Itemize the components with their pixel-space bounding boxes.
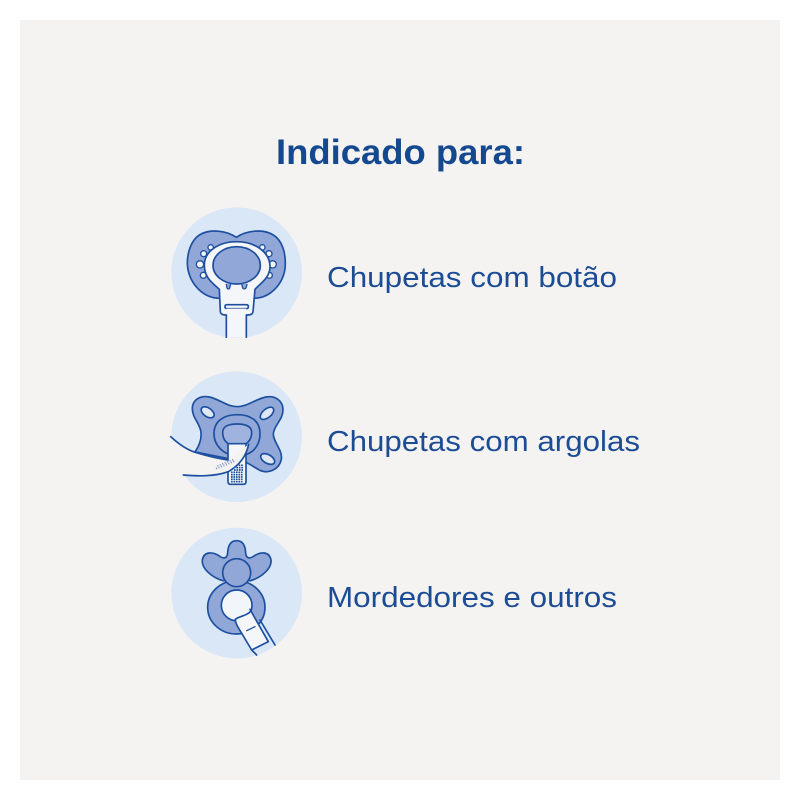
label: pacifiers with rings: Chupetas com argolas bbox=[327, 426, 640, 458]
icon: teether bbox=[171, 528, 302, 658]
label: teethers and others: Mordedores e outros bbox=[327, 582, 617, 614]
title: Indicado para: bbox=[276, 133, 525, 172]
label: pacifiers with button: Chupetas com botão bbox=[327, 262, 617, 294]
icon: pacifier with button bbox=[171, 207, 302, 338]
icon: pacifier with ring bbox=[167, 371, 302, 502]
